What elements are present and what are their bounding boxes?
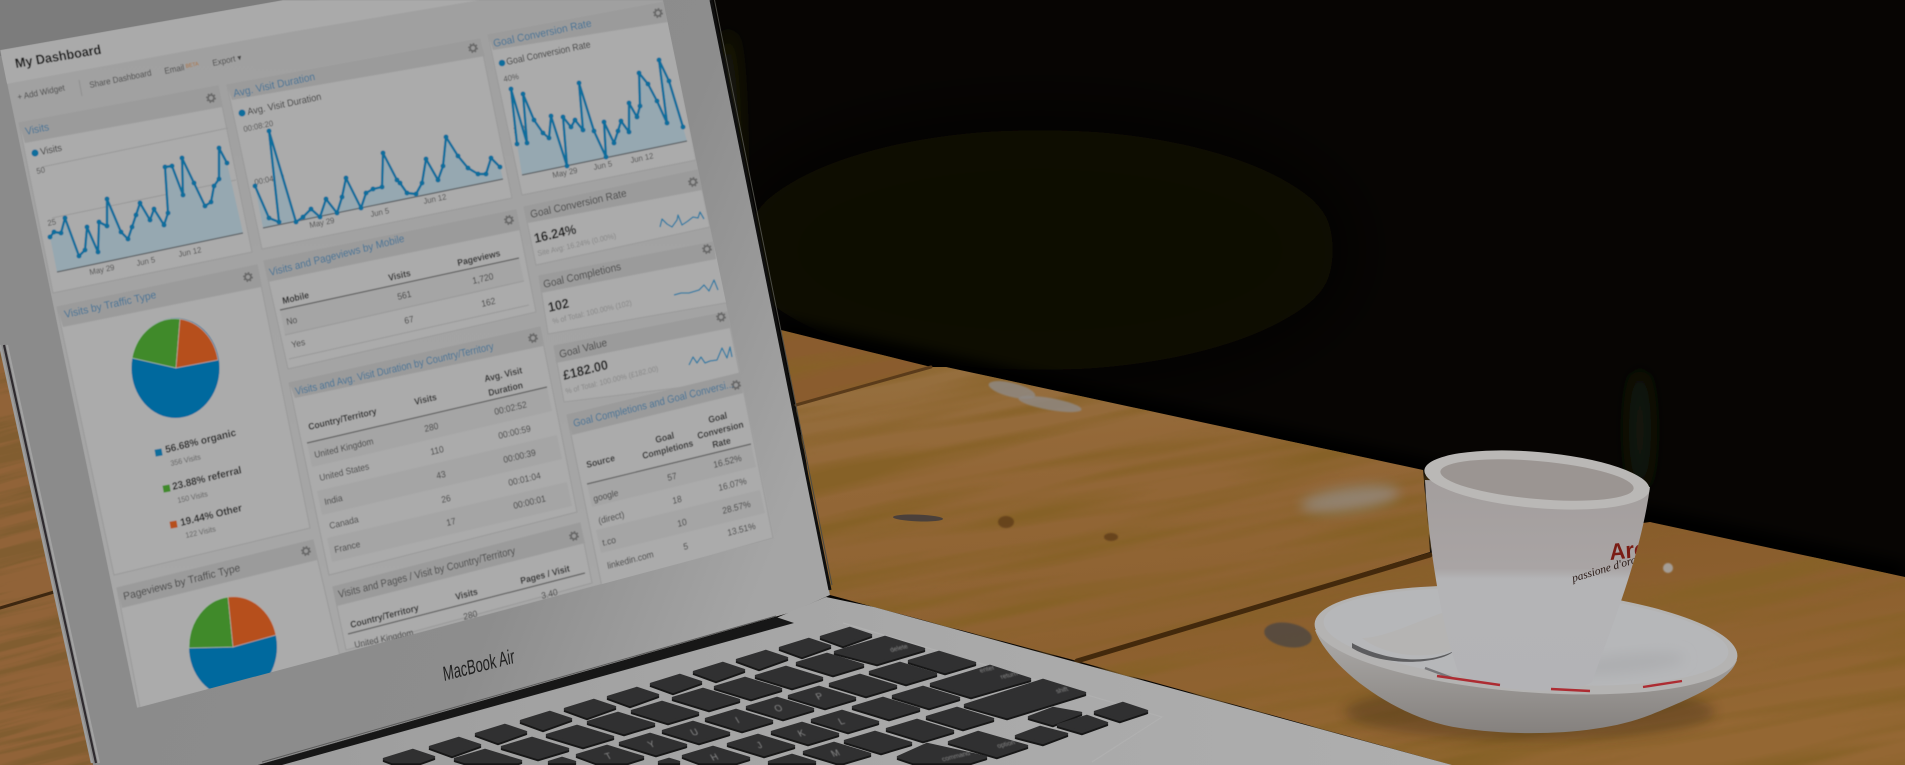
function key row [384,628,871,762]
table: country duration: Canada [328,514,359,531]
lid top-left dark bezel [0,0,320,56]
table: country duration: 00:00:39 [502,447,537,465]
panel: Visits: Jun 12 [178,245,203,259]
top toolbar: My Dashboard [14,42,103,71]
legend: visits [155,428,243,540]
key legends: I [734,716,742,726]
line chart: Goal Conversion Rate [511,60,687,175]
wooden table planks [0,320,1905,765]
panel: Visits: 25 [47,217,57,228]
key legends: delete [889,643,910,654]
cup rim [1422,442,1652,518]
table: mobile [280,248,529,359]
laptop keyboard deck [258,597,1452,765]
table: source: Conversion [696,419,744,441]
panel: Visits and Pageviews by Mobile: Visits and Pageviews by Mobile [268,233,406,279]
coffee cup [1424,450,1650,652]
table: source: Completions [641,438,694,461]
key legends: T [603,751,614,762]
table: country duration: France [333,539,361,555]
panel: Visits: Visits [39,142,63,158]
key legends: command [941,750,972,763]
table: source: Goal [654,430,675,445]
table: pages per visit: Pages / Visit [519,563,571,586]
panel: Visits and Pageviews by Mobile [268,214,521,348]
panel: Visits and Avg. Visit Duration by Country/Territory: Visits and Avg. Visit Duration by Country/Territory [294,341,495,398]
teaspoon [1352,612,1454,678]
coffee saucer [1311,572,1741,740]
key legends: P [814,691,826,702]
panel: Visits: May 29 [89,263,116,277]
table: source [585,410,765,571]
panel: Goal Completions summary: 102 [547,295,570,315]
keyboard well outline [843,623,1162,762]
table: source: Rate [711,435,732,450]
table: mobile: No [285,314,298,327]
panel: Pageviews by Traffic Type: Pageviews by Traffic Type [122,562,241,603]
table: pages per visit: Visits [454,586,479,602]
panel: Goal Conversion Rate chart: 40% [503,72,520,84]
panel: Goal Value summary: £182.00 [562,357,609,383]
panel: Goal Conversion Rate chart: 20% [513,123,530,135]
home key row [659,666,1030,762]
panel: Goal Value summary [554,312,733,392]
number key row [455,637,924,762]
panel: Visits: 50 [36,165,46,176]
panel: Visits and Pages / Visit by Country/Territory [333,523,592,650]
laptop lid [0,0,832,765]
table: source: 28.57% [721,499,752,516]
top toolbar: Email [163,62,185,76]
table: source: Source [585,453,616,470]
line chart: Avg. Visit Duration [255,131,503,228]
table: pages per visit: 3.40 [540,587,559,601]
shift key row [769,680,1085,762]
table: source: 16.52% [712,453,743,470]
table: pages per visit: Country/Territory [349,602,420,630]
panel: Visits by Traffic Type: Visits by Traffic Type [63,289,158,321]
panel: Goal Conversion Rate summary: Site Avg: 16.24% (0.00%) [537,231,617,258]
table: country duration: 00:02:52 [493,399,528,417]
panel: Goal Conversion Rate chart: Jun 12 [630,151,655,165]
table: country duration: Visits [413,392,438,407]
table: mobile: 67 [403,314,415,326]
key legends: option [996,739,1017,750]
panel: Goal Conversion Rate chart [488,2,696,195]
table: source: 16.07% [717,476,748,493]
key legends: U [689,727,701,738]
key legends: J [755,740,765,751]
table: mobile: 162 [480,296,496,309]
saucer red rim marks [1437,676,1682,691]
table: mobile: Visits [387,268,412,283]
brand label: MacBook Air: MacBook Air [442,645,516,686]
table: country duration: Duration [487,380,524,398]
keys [384,628,1147,762]
table: mobile: 1,720 [471,271,494,286]
panel: Avg. Visit Duration: May 29 [309,216,336,230]
panel: Goal Conversion Rate summary: Goal Conversion Rate [529,188,628,221]
panel: Visits: Jun 5 [136,255,157,268]
sparkline [674,280,718,295]
pie chart: pageviews [189,597,277,697]
cup brand logo: Arom [1609,534,1667,565]
panel: Goal Conversion Rate chart: Jun 5 [593,159,614,172]
table: source: 13.51% [726,521,757,538]
table: country duration: Country/Territory [307,406,378,432]
key legends [603,643,1070,763]
key legends: L [836,716,847,727]
top toolbar: BETA [185,61,200,70]
cup brand logo: passione d'oro [1570,554,1638,585]
table: country duration: 26 [440,493,452,505]
table marks: paint smudges and knots [893,377,1673,651]
legend: visits: 122 Visits [185,524,217,540]
table: country duration: 00:00:01 [512,493,547,511]
panel: Avg. Visit Duration: 00:08:20 [243,119,274,134]
table: country duration: India [323,493,343,507]
key legends: Y [646,739,658,750]
panel: Goal Conversion Rate summary [529,176,708,254]
key legends: shift [1055,686,1070,695]
panel: Avg. Visit Duration: Jun 12 [423,192,448,206]
dashboard screen [0,0,775,708]
key legends: return [999,670,1020,681]
qwerty key row [549,652,975,762]
table: country duration: 00:00:59 [497,423,532,441]
key legends: enter [978,665,997,675]
table: country duration: United States [318,461,371,483]
table: country duration [306,367,548,554]
table: source: google [592,487,619,504]
panel: Avg. Visit Duration: Avg. Visit Duration [246,91,322,118]
table: country duration: 110 [429,444,445,457]
panel: Goal Value summary: Goal Value [558,338,608,361]
line chart: Visits [50,148,243,272]
panel: Visits and Pages / Visit by Country/Territory: Visits and Pages / Visit by Country/Territory [337,545,517,601]
table: source: 18 [671,493,683,506]
lid outer edges [0,0,832,763]
table: mobile: 561 [396,289,412,302]
legend: visits: 150 Visits [177,489,209,505]
table: source: 5 [682,541,689,552]
dashboard background [0,0,775,708]
panel: Goal Conversion Rate chart: Goal Conversion Rate [505,39,591,67]
table: mobile: Yes [290,337,307,350]
panel: Avg. Visit Duration [227,39,512,249]
top toolbar: Export ▾ [211,52,242,68]
top toolbar: + Add Widget [16,82,66,102]
pie chart: visits [132,318,220,418]
panel: Visits and Avg. Visit Duration by Country/Territory [289,332,548,575]
table: country duration: Avg. Visit [483,365,523,384]
sparkline [689,347,732,365]
table: mobile: Mobile [281,290,310,306]
table: source: Goal [707,410,728,425]
table: country duration: 00:01:04 [507,470,542,488]
panel: Goal Completions and Goal Conversion table: Goal Completions and Goal Conversi... [572,379,735,430]
top toolbar: Share Dashboard [88,67,153,90]
top toolbar [0,0,480,102]
panel: Visits [24,92,248,275]
plank seams [0,367,1430,661]
panel: Avg. Visit Duration: 00:04:10 [254,172,285,187]
table: source: linkedin.com [606,549,654,571]
panel: Goal Completions summary [542,244,726,318]
wood grain [780,320,1905,765]
panel: Visits: Visits [24,122,50,138]
table: pages per visit: United Kingdom [353,627,414,650]
legend: visits: 356 Visits [170,452,202,468]
table: source: 57 [666,470,678,483]
panel: Visits by Traffic Type [62,271,254,575]
key legends: O [772,703,785,715]
table: source: 10 [676,516,688,529]
panel: Goal Value summary: % of Total: 100.00% (£182.00) [565,364,659,396]
panel: Goal Conversion Rate chart: Goal Conversion Rate [492,18,593,50]
table: country duration: 280 [423,421,439,434]
table: mobile: Pageviews [456,248,501,268]
panel: Goal Completions summary: Goal Completions [542,262,622,291]
panel: Avg. Visit Duration: Avg. Visit Duration [232,72,316,100]
key legends: M [829,748,842,760]
panel: Goal Completions and Goal Conversion table [567,373,773,587]
table: country duration: 43 [435,469,447,481]
key legends: H [709,752,721,763]
table: pages per visit [348,563,585,650]
legend: visits: 56.68% organic [164,428,237,456]
key legends: K [796,728,808,739]
table: pages per visit: 280 [462,608,478,622]
panel: Avg. Visit Duration: Jun 5 [370,206,391,219]
table: country duration: 17 [445,516,457,528]
sparkline [660,212,704,227]
panel: Pageviews by Traffic Type [117,540,340,708]
bottom row and arrow keys [898,703,1147,762]
legend: visits: 19.44% Other [179,503,243,529]
hinge strip [258,617,794,765]
panel: Goal Conversion Rate summary: 16.24% [533,221,578,246]
panel: Goal Completions summary: % of Total: 100.00% (102) [552,298,633,326]
table: source: (direct) [597,509,625,526]
table: country duration: United Kingdom [313,436,374,460]
legend: visits: 23.88% referral [171,465,243,493]
panel: Goal Conversion Rate chart: May 29 [552,166,579,180]
table: source: t.co [601,534,617,548]
